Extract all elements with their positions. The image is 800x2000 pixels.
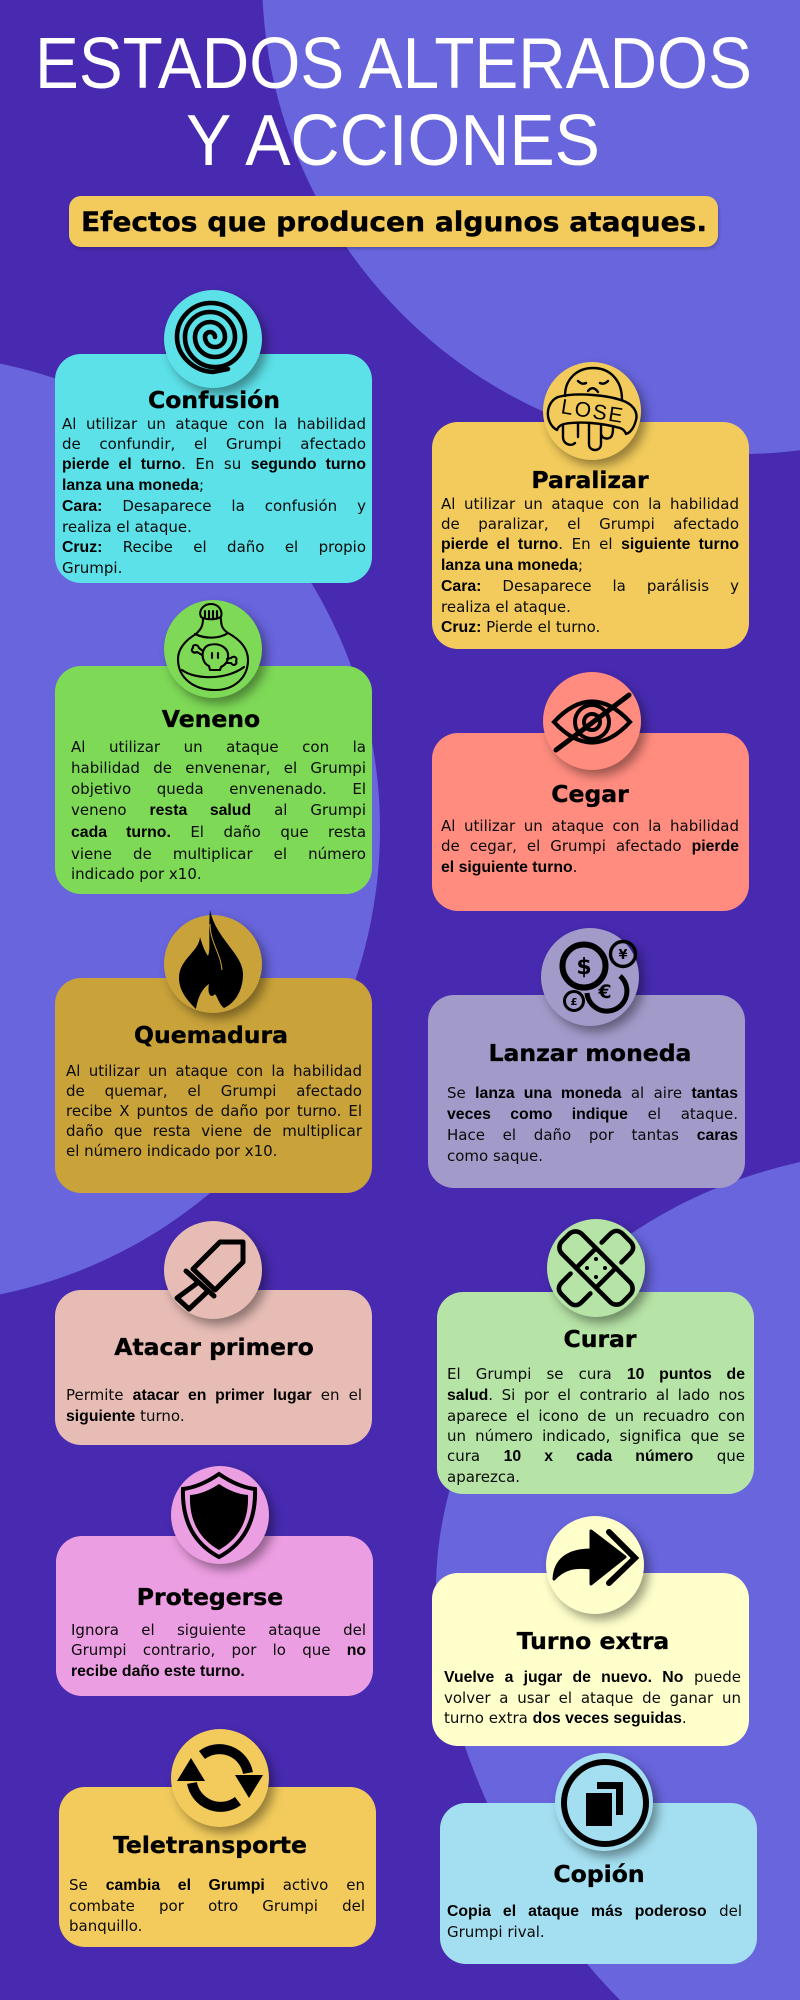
description: Cara: Desaparece la confusión y bbox=[62, 497, 366, 515]
description: volver a usar el ataque de ganar un bbox=[444, 1689, 741, 1707]
description bbox=[66, 1386, 362, 1425]
icon: crossed eye bbox=[543, 672, 641, 770]
description: pierde el turno. En el siguiente turno bbox=[441, 535, 739, 553]
description bbox=[69, 1876, 365, 1935]
description bbox=[71, 738, 366, 883]
icon: coins bbox=[541, 928, 639, 1026]
panel: Atacar primero bbox=[55, 1221, 372, 1445]
description: indicado por x10. bbox=[71, 865, 202, 883]
description: aparece el icono de un recuadro con bbox=[447, 1407, 745, 1425]
description: de quemar, el Grumpi afectado bbox=[66, 1082, 362, 1100]
description: objetivo queda envenenado. El bbox=[71, 780, 366, 798]
description: lanza una moneda; bbox=[441, 556, 583, 574]
panel: Quemadura bbox=[55, 910, 372, 1193]
description: como saque. bbox=[447, 1147, 543, 1165]
panel: Turno extra bbox=[432, 1516, 749, 1746]
description: Ignora el siguiente ataque del bbox=[71, 1621, 366, 1639]
description: Grumpi rival. bbox=[447, 1923, 545, 1941]
icon: copy bbox=[555, 1753, 653, 1851]
description: turno extra dos veces seguidas. bbox=[444, 1709, 687, 1727]
heading: Copión bbox=[553, 1860, 645, 1888]
description: de paralizar, el Grumpi afectado bbox=[441, 515, 739, 533]
panel: Veneno bbox=[55, 600, 372, 894]
title: ESTADOS ALTERADOS bbox=[35, 24, 752, 104]
icon: refresh arrows bbox=[171, 1729, 269, 1827]
panel: Curar bbox=[437, 1219, 754, 1494]
description: Cara: Desaparece la parálisis y bbox=[441, 577, 739, 595]
description: cura 10 x cada número que bbox=[447, 1447, 745, 1465]
description: Grumpi. bbox=[62, 559, 122, 577]
heading: Turno extra bbox=[517, 1627, 669, 1655]
description: recibe daño este turno. bbox=[71, 1663, 245, 1680]
panel: Confusión bbox=[55, 290, 372, 583]
title: Y ACCIONES bbox=[186, 101, 600, 181]
description: Al utilizar un ataque con la habilidad bbox=[441, 817, 739, 835]
description: realiza el ataque. bbox=[441, 598, 571, 616]
subtitle banner bbox=[69, 196, 718, 247]
description bbox=[444, 1668, 741, 1727]
description: Al utilizar un ataque con la habilidad bbox=[441, 495, 739, 513]
description: Vuelve a jugar de nuevo. No puede bbox=[444, 1668, 741, 1686]
description: daño que resta viene de multiplicar bbox=[66, 1122, 362, 1140]
panel: Protegerse bbox=[56, 1466, 373, 1696]
icon: flame bbox=[164, 915, 262, 1013]
description bbox=[62, 415, 366, 577]
description: banquillo. bbox=[69, 1917, 142, 1935]
description: Se lanza una moneda al aire tantas bbox=[447, 1084, 738, 1102]
description: un número indicado, significa que se bbox=[447, 1427, 745, 1445]
icon: coins: £ bbox=[571, 997, 578, 1008]
heading: Protegerse bbox=[137, 1583, 283, 1611]
icon: shield bbox=[171, 1466, 269, 1564]
description: el número indicado por x10. bbox=[66, 1142, 277, 1160]
heading: Quemadura bbox=[134, 1021, 288, 1049]
icon: coins: ¥ bbox=[618, 948, 628, 963]
description: combate por otro Grumpi del bbox=[69, 1897, 365, 1915]
description: de cegar, el Grumpi afectado pierde bbox=[441, 837, 739, 855]
description: habilidad de envenenar, el Grumpi bbox=[71, 759, 366, 777]
description bbox=[447, 1084, 738, 1165]
description: lanza una moneda; bbox=[62, 476, 204, 494]
icon: double arrow bbox=[546, 1516, 644, 1614]
description bbox=[66, 1062, 362, 1160]
heading: Veneno bbox=[162, 705, 260, 733]
icon: spiral bbox=[164, 290, 262, 388]
description: salud. Si por el contrario al lado nos bbox=[447, 1386, 745, 1404]
heading: Atacar primero bbox=[114, 1333, 314, 1361]
panel: Teletransporte bbox=[59, 1729, 376, 1947]
description: siguiente turno. bbox=[66, 1407, 185, 1425]
heading: Cegar bbox=[551, 780, 629, 808]
description bbox=[71, 1621, 366, 1680]
description: el siguiente turno. bbox=[441, 858, 577, 876]
heading: Paralizar bbox=[531, 466, 649, 494]
description: Al utilizar un ataque con la bbox=[71, 738, 366, 756]
description: recibe X puntos de daño por turno. El bbox=[66, 1102, 362, 1120]
description: realiza el ataque. bbox=[62, 518, 192, 536]
panel: Lanzar moneda bbox=[428, 928, 745, 1188]
heading: Lanzar moneda bbox=[489, 1039, 691, 1067]
description bbox=[441, 495, 739, 636]
icon: sword bbox=[164, 1221, 262, 1319]
icon: bandage bbox=[546, 1219, 644, 1317]
description: pierde el turno. En su segundo turno bbox=[62, 455, 366, 473]
description: Hace el daño por tantas caras bbox=[447, 1126, 738, 1144]
description: Grumpi contrario, por lo que no bbox=[71, 1641, 366, 1659]
description: cada turno. El daño que resta bbox=[71, 823, 366, 841]
heading: Curar bbox=[563, 1325, 636, 1353]
icon: lose banner bbox=[543, 362, 641, 460]
description: aparezca. bbox=[447, 1468, 520, 1486]
description: veneno resta salud al Grumpi bbox=[71, 801, 366, 819]
description: de confundir, el Grumpi afectado bbox=[62, 435, 366, 453]
title bbox=[35, 24, 752, 181]
description: El Grumpi se cura 10 puntos de bbox=[447, 1365, 745, 1383]
description: veces como indique el ataque. bbox=[447, 1105, 738, 1123]
heading: Confusión bbox=[148, 386, 280, 414]
description: Al utilizar un ataque con la habilidad bbox=[66, 1062, 362, 1080]
description: viene de multiplicar el número bbox=[71, 845, 366, 863]
panel: Copión bbox=[440, 1753, 757, 1964]
subtitle banner: Efectos que producen algunos ataques. bbox=[81, 207, 707, 238]
icon: lose banner: LOSE bbox=[560, 395, 624, 428]
heading: Teletransporte bbox=[113, 1831, 307, 1859]
description: Se cambia el Grumpi activo en bbox=[69, 1876, 365, 1894]
description bbox=[447, 1902, 742, 1941]
icon: poison bottle bbox=[164, 600, 262, 698]
description bbox=[441, 817, 739, 876]
panel: Cegar bbox=[432, 672, 749, 911]
icon: coins: € bbox=[597, 981, 612, 1003]
description bbox=[447, 1365, 745, 1486]
description: Cruz: Recibe el daño el propio bbox=[62, 538, 366, 556]
icon: coins: $ bbox=[576, 955, 592, 980]
description: Al utilizar un ataque con la habilidad bbox=[62, 415, 366, 433]
description: Permite atacar en primer lugar en el bbox=[66, 1386, 362, 1404]
description: Copia el ataque más poderoso del bbox=[447, 1902, 742, 1920]
description: Cruz: Pierde el turno. bbox=[441, 618, 600, 636]
panel: Paralizar bbox=[432, 362, 749, 649]
